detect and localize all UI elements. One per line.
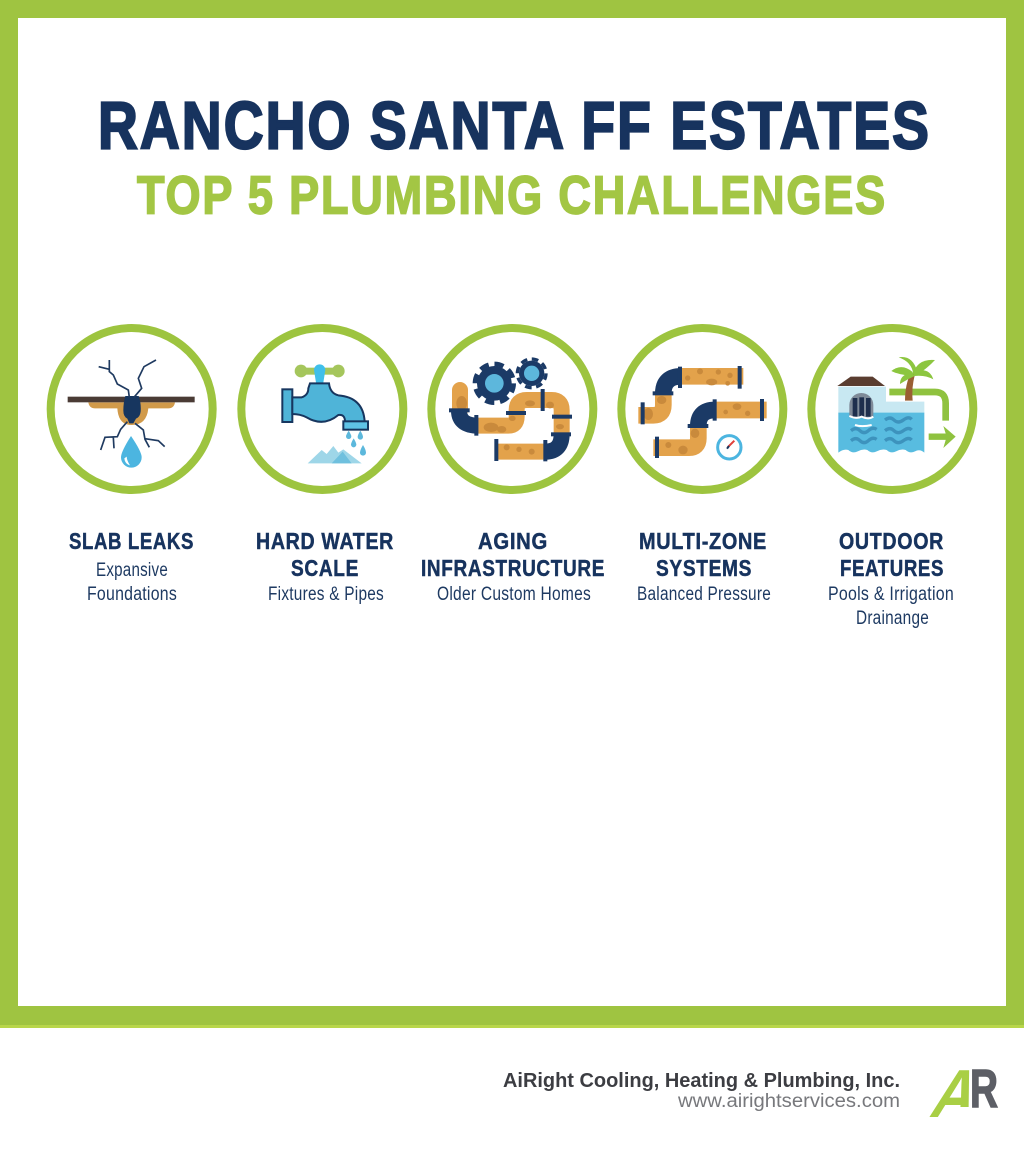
description: aging infrastructure: Older Custom Homes [437, 584, 591, 605]
heading: outdoor features: FEATURES [840, 555, 944, 581]
heading: hard water scale: SCALE [291, 555, 359, 581]
description: multi-zone systems: Balanced Pressure [637, 584, 771, 605]
description: slab leaks: Expansive [96, 560, 168, 581]
panel: aging infrastructure [421, 328, 605, 605]
description: outdoor features: Drainange [856, 608, 929, 629]
icon: dripping faucet [241, 328, 403, 490]
description: outdoor features [828, 584, 954, 629]
heading: aging infrastructure: AGING [478, 528, 548, 554]
heading: multi-zone systems [639, 528, 767, 581]
subtitle: TOP 5 PLUMBING CHALLENGES [137, 166, 887, 226]
footer website: www.airightservices.com [677, 1091, 900, 1112]
heading: hard water scale [256, 528, 394, 581]
logo: AR monogram: A [923, 1056, 990, 1132]
heading: hard water scale: HARD WATER [256, 528, 394, 554]
icon: corroded pipes and gears [431, 328, 593, 490]
heading: multi-zone systems: MULTI-ZONE [639, 528, 767, 554]
description: slab leaks [87, 560, 177, 605]
heading: aging infrastructure: INFRASTRUCTURE [421, 555, 605, 581]
heading: slab leaks: SLAB LEAKS [69, 528, 194, 554]
icon: zoned pipes with pressure gauge [621, 328, 783, 490]
description: outdoor features: Pools & Irrigation [828, 584, 954, 605]
icon: cracked slab with water drop [51, 328, 213, 490]
heading: multi-zone systems: SYSTEMS [656, 555, 752, 581]
heading: aging infrastructure [421, 528, 605, 581]
heading: outdoor features [839, 528, 944, 581]
icon: pool, palm and drainage arrow [811, 328, 973, 490]
panel: slab leaks [51, 328, 213, 605]
panel: hard water scale [241, 328, 403, 605]
footer company name: AiRight Cooling, Heating & Plumbing, Inc. [503, 1070, 900, 1092]
description: slab leaks: Foundations [87, 584, 177, 605]
panel: outdoor features [811, 328, 973, 629]
description: hard water scale: Fixtures & Pipes [268, 584, 384, 605]
panel: multi-zone systems [621, 328, 783, 605]
heading: outdoor features: OUTDOOR [839, 528, 944, 554]
logo: AR monogram: R [970, 1059, 998, 1119]
